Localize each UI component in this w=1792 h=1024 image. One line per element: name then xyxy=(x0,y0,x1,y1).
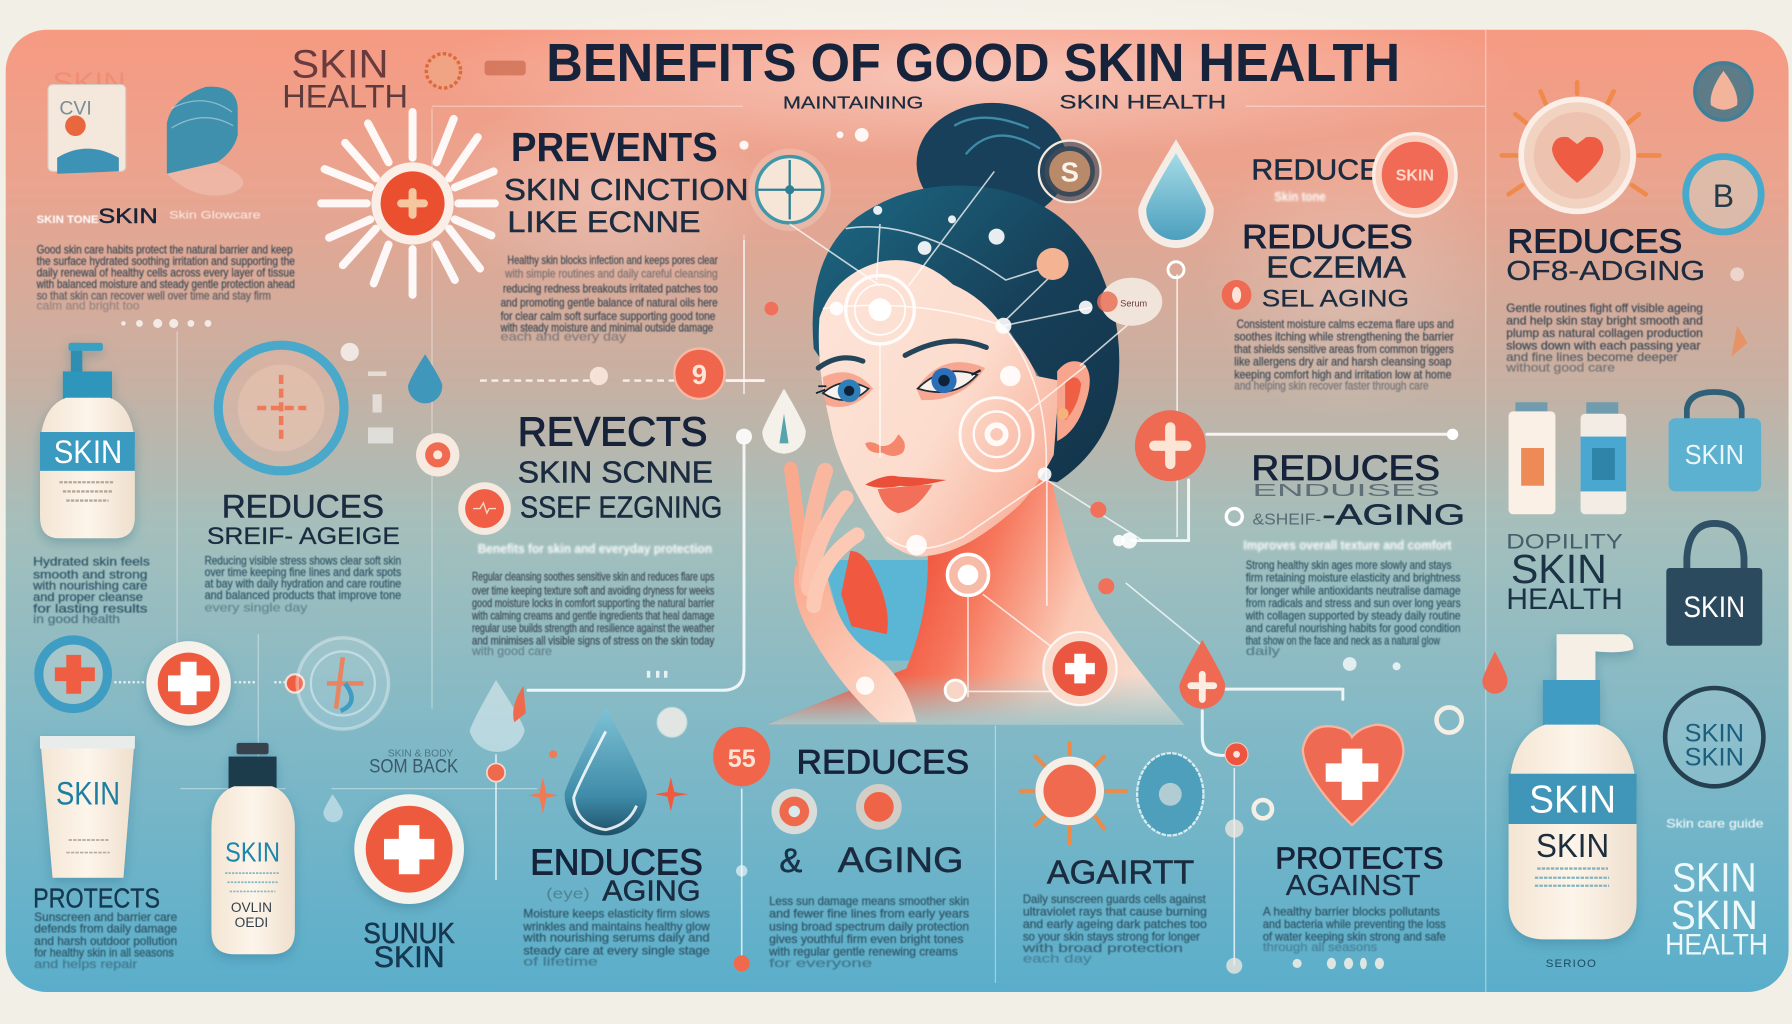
accent: blue patch behind hand xyxy=(823,560,931,661)
icon: blue bag: SKIN xyxy=(1685,439,1744,470)
title: BENEFITS OF GOOD SKIN HEALTH xyxy=(546,33,1400,93)
panel: top-left text: Skin Glowcare xyxy=(169,209,261,221)
heading: reduce with badge: REDUCE xyxy=(1251,154,1379,186)
icon: chest ring small xyxy=(945,680,966,701)
text block: protects against: of water keeping skin strong and safe xyxy=(1263,930,1446,944)
heading: reduces self-aging: ENDUISES xyxy=(1253,480,1440,500)
illustration: woman with skin map xyxy=(767,103,1202,725)
text block: protects left: defends from daily damage xyxy=(34,922,177,936)
small accent dots xyxy=(1730,267,1747,357)
text block: under bottle xyxy=(32,555,150,626)
logo: skin skin health white xyxy=(1665,854,1768,961)
icon: neck ring xyxy=(947,554,989,595)
icon: pump bottle xyxy=(1509,634,1637,939)
illustration: eye shadow xyxy=(823,362,985,407)
icon: pump bottle: SKIN xyxy=(1529,779,1616,822)
text block: prevents xyxy=(500,253,718,344)
small dots xyxy=(647,671,667,678)
text block: enduces: wrinkles and maintains healthy glow xyxy=(522,919,710,933)
small coral dots xyxy=(765,302,1114,594)
icon: dark ring skin badge: SKIN xyxy=(1685,720,1744,748)
text block: reduces self-aging: from radicals and stress and sun over long years xyxy=(1246,596,1461,610)
illustration: skin network nodes xyxy=(830,206,1137,695)
accent: fade below shoulders xyxy=(767,469,1184,725)
panel: top-left text: calm and bright too xyxy=(37,299,140,313)
text block: revects: with calming creams and gentle ingredients that heal damage xyxy=(471,608,715,622)
text block: protects left: Sunscreen and barrier care xyxy=(34,910,177,924)
text block: reduces and aging: and fewer fine lines from early years xyxy=(769,907,969,921)
text block: reduces self-aging: that show on the face and neck as a natural glow xyxy=(1246,634,1440,648)
text block: reduces eczema: Consistent moisture calms eczema flare ups and xyxy=(1237,317,1454,331)
illustration: eyebrows xyxy=(818,341,986,368)
icon: coral connector node xyxy=(1225,743,1248,974)
label: sunuk skin: SKIN xyxy=(374,941,445,974)
heading: reduces eczema: SEL AGING xyxy=(1262,285,1409,312)
panel: top-left text: daily renewal of healthy cells across every layer of tissue xyxy=(37,266,295,280)
icon: bun coin badge xyxy=(1039,141,1101,202)
icon: coral tag xyxy=(1222,280,1251,310)
heading: revects: SSEF EZGNING xyxy=(520,490,722,525)
heading: reduces and aging: REDUCES xyxy=(797,744,969,782)
dotted connector xyxy=(114,681,286,683)
icon: skin bottle left: SKIN xyxy=(54,434,122,470)
icon: blue ring badge: B xyxy=(1713,178,1734,214)
text block: revects: with good care xyxy=(471,644,552,658)
icon: product box and blue pouch xyxy=(48,66,243,196)
icon: glass circle xyxy=(286,638,389,729)
text block: under bottle: in good health xyxy=(33,612,120,626)
text block: against: ultraviolet rays that cause burning xyxy=(1023,904,1207,918)
pagination dots xyxy=(1293,958,1384,969)
text block: against: and early ageing dark patches too xyxy=(1023,917,1207,931)
icon: bottle with black cap: OEDI xyxy=(235,915,268,930)
icon: coral pulse badge xyxy=(458,482,511,535)
icon: white ring red cross xyxy=(146,641,231,726)
panel: top-left text xyxy=(36,203,295,313)
text block: reduces left xyxy=(205,554,401,614)
text block: prevents: reducing redness breakouts irritated patches too xyxy=(503,282,718,296)
icon: small blue drop xyxy=(408,354,442,403)
icon: drop with cross xyxy=(1179,640,1225,709)
icon: skin bottle left xyxy=(40,343,135,538)
icon: product box and blue pouch: SKIN xyxy=(53,66,126,97)
icon: coral badge xyxy=(1374,134,1456,216)
text block: under bottle: for lasting results xyxy=(33,602,147,616)
panel: right column xyxy=(1482,63,1768,970)
heading: enduces: ENDUCES xyxy=(530,841,703,882)
text block: reduces right: and help skin stay bright smooth and xyxy=(1506,314,1703,328)
icon: round blue gauge xyxy=(218,343,359,471)
logo: skin skin health white: SKIN xyxy=(1672,854,1757,900)
heading: reduces eczema: REDUCES xyxy=(1242,219,1413,256)
text block: reduces eczema: and helping skin recover faster through care xyxy=(1234,379,1429,393)
heading: reduces eczema: ECZEMA xyxy=(1266,250,1406,285)
text block: reduces right: slows down with each passing year xyxy=(1506,339,1701,353)
heading: protects left: PROTECTS xyxy=(33,882,160,913)
heading: reduces right xyxy=(1506,224,1705,286)
text block: protects against xyxy=(1263,904,1446,954)
small dots row xyxy=(1343,657,1401,671)
logo: skin health wordmark: HEALTH xyxy=(282,78,408,114)
text block: reduces self-aging: firm retaining moisture elasticity and brightness xyxy=(1246,571,1461,585)
subtitle left: MAINTAINING xyxy=(783,93,923,113)
icon: water drop top xyxy=(1138,139,1214,278)
text block: enduces xyxy=(522,907,710,969)
icon: product box and blue pouch: CVI xyxy=(59,97,92,119)
text block: reduces self-aging xyxy=(1243,539,1461,658)
text block: under bottle: and proper cleanse xyxy=(33,590,143,604)
icon: header stamps xyxy=(426,54,526,88)
text block: reduces right xyxy=(1505,301,1703,374)
heading: reduce with badge: Skin tone xyxy=(1274,190,1326,204)
heading: reduces and aging: & xyxy=(779,842,802,880)
icon: pair of small bottles xyxy=(1509,402,1626,514)
heading: dopility skin health: SKIN xyxy=(1511,546,1607,592)
heading: enduces xyxy=(530,841,703,908)
small rings xyxy=(1254,707,1462,818)
illustration: lips xyxy=(865,476,946,513)
heading: against: AGAIRTT xyxy=(1047,854,1194,891)
icon: cheek target xyxy=(960,398,1033,471)
icon: small white badge xyxy=(657,707,687,737)
icon: compass circle xyxy=(749,149,831,231)
icon: forehead target xyxy=(846,275,914,344)
text block: prevents: for clear calm soft surface supporting good tone xyxy=(501,309,716,323)
text block: protects against: through all seasons xyxy=(1263,940,1377,954)
small text below bottle: SERIOO xyxy=(1546,958,1597,970)
icon: garlic-like dark badge xyxy=(1695,63,1752,120)
text block: revects: good moisture locks in comfort supporting the natural barrier xyxy=(472,596,714,610)
text block: reduces and aging: using broad spectrum daily protection xyxy=(769,919,969,933)
logo: skin skin health white: HEALTH xyxy=(1665,928,1768,961)
icon: pump bottle: SKIN xyxy=(1536,828,1609,865)
text block: reduces eczema xyxy=(1234,317,1454,393)
illustration: skin network lines xyxy=(790,171,1202,697)
heading: reduces left: REDUCES xyxy=(222,489,384,525)
icon: bottle with black cap xyxy=(211,743,295,954)
subtitle right: SKIN HEALTH xyxy=(1059,92,1226,114)
illustration: hair xyxy=(813,103,1119,482)
text block: reduces left: Reducing visible stress shows clear soft skin xyxy=(205,554,401,568)
text block: prevents: and promoting gentle balance of natural oils here xyxy=(501,295,718,309)
text block: revects: over time keeping texture soft and avoiding dryness for weeks xyxy=(472,583,714,597)
text block: reduces self-aging: daily xyxy=(1246,644,1280,658)
text block: reduces and aging: Less sun damage means smoother skin xyxy=(769,894,969,908)
illustration: hand xyxy=(791,469,917,722)
icon: heart shield with cross xyxy=(1303,725,1403,825)
text block: revects: Regular cleansing soothes sensitive skin and reduces flare ups xyxy=(472,570,714,584)
text block: protects left xyxy=(34,910,177,971)
logo: skin health wordmark xyxy=(282,43,408,114)
text block: reduces left: over time keeping fine lines and dark spots xyxy=(205,565,401,579)
heading: reduces and aging xyxy=(779,744,969,880)
panel: top-left text: SKIN xyxy=(98,203,158,228)
heading: revects xyxy=(518,409,722,525)
icon: hair white badge xyxy=(1097,278,1162,326)
label: sunuk skin xyxy=(363,918,455,974)
text block: reduces eczema: soothes itching while strengthening the barrier xyxy=(1234,330,1454,344)
illustration: right eye xyxy=(918,368,981,393)
panel: top-left text: so that skin can recover well over time and stay firm xyxy=(37,288,271,302)
label: sunuk skin: SUNUK xyxy=(363,918,455,950)
heading: enduces: AGING xyxy=(602,876,701,908)
heading: prevents: PREVENTS xyxy=(511,124,718,170)
heading: enduces: (eye) xyxy=(546,886,590,902)
icon: coral nodes xyxy=(734,784,902,971)
icon: shoulder cross badge xyxy=(1043,632,1117,705)
dashed connector xyxy=(480,380,674,382)
text block: reduces eczema: like allergens dry air and harsh cleansing soap xyxy=(1234,355,1452,369)
icon: tube: SKIN xyxy=(56,776,120,812)
icon: small white ring xyxy=(1226,509,1242,525)
text block: prevents: Healthy skin blocks infection and keeps pores clear xyxy=(507,253,718,267)
text block: enduces: with nourishing serums daily and xyxy=(522,931,710,945)
small white marks near drop xyxy=(368,371,393,443)
logo: skin skin health white: SKIN xyxy=(1671,892,1758,938)
heading: dopility skin health xyxy=(1506,529,1623,616)
heading: reduces left xyxy=(207,489,400,550)
heading: protects against: PROTECTS xyxy=(1275,841,1443,876)
icon: coral circle with cross shape xyxy=(1135,410,1458,481)
icon: blue ring cross xyxy=(39,640,107,709)
heading: revects: REVECTS xyxy=(518,409,707,455)
heading: revects: SKIN SCNNE xyxy=(518,454,713,489)
illustration: left eye xyxy=(816,379,869,402)
icon: tube xyxy=(40,736,135,878)
text block: prevents: with steady moisture and minimal outside damage xyxy=(500,320,713,334)
icon: coral badge: SKIN xyxy=(1396,168,1434,185)
heading: reduces self-aging xyxy=(1251,448,1465,532)
icon: coral drop xyxy=(1482,651,1508,694)
icon: sun with medical cross xyxy=(321,112,495,295)
icon: sun heart badge xyxy=(1502,82,1659,211)
icon: bottle with black cap: SKIN xyxy=(225,837,280,868)
text block: reduces self-aging: for longer while antioxidants neutralise damage xyxy=(1246,583,1461,597)
panel: top-left text: SKIN TONE xyxy=(37,214,99,226)
text block: reduces self-aging: and careful nourishing habits for good condition xyxy=(1246,621,1461,635)
illustration: face xyxy=(819,260,1059,557)
icon: translucent drop with red accent xyxy=(470,680,526,782)
panel: top-left text: the surface hydrated soothing irritation and supporting the xyxy=(37,254,295,268)
text block: protects left: and helps repair xyxy=(34,957,137,971)
panel: top-left text: with balanced moisture and steady gentle protection ahead xyxy=(36,277,295,291)
text block: protects left: and harsh outdoor pollution xyxy=(34,934,177,948)
heading: dopility skin health: HEALTH xyxy=(1506,583,1623,616)
icon: coral oval badge: 55 xyxy=(728,745,756,773)
small text: skin back xyxy=(369,749,458,778)
icon: white drop mid xyxy=(762,389,806,454)
logo: skin health wordmark: SKIN xyxy=(291,43,389,87)
icon: blue ring badge xyxy=(1686,157,1761,232)
heading: reduces eczema xyxy=(1242,219,1413,312)
text block: reduces right: and fine lines become deeper xyxy=(1506,350,1678,364)
text block: reduces and aging: for everyone xyxy=(769,956,873,970)
icon: bottle with black cap: OVLIN xyxy=(231,900,272,915)
icon: dark bag: SKIN xyxy=(1683,591,1745,624)
small drop xyxy=(323,794,343,822)
text block: under bottle: with nourishing care xyxy=(32,579,148,593)
small blurred caption: Skin care guide xyxy=(1666,816,1764,830)
text block: revects xyxy=(471,542,715,658)
heading: reduces left: SREIF- AGEIGE xyxy=(207,523,400,550)
text block: enduces: steady care at every single stage xyxy=(523,943,710,957)
text block: enduces: Moisture keeps elasticity firm slows xyxy=(523,907,710,921)
text block: reduces eczema: that shields sensitive areas from common triggers xyxy=(1234,342,1454,356)
text block: revects: and minimises all visible signs of stress on the skin today xyxy=(472,634,714,648)
icon: small target badge xyxy=(416,433,459,477)
text block: reduces right: Gentle routines fight off visible ageing xyxy=(1506,301,1703,315)
text block: reduces eczema: keeping comfort high and irritation low at home xyxy=(1234,367,1452,381)
icon: dark ring skin badge: SKIN xyxy=(1685,744,1744,772)
heading: reduces and aging: AGING xyxy=(838,840,963,880)
icon: bun coin badge: S xyxy=(1061,157,1079,188)
icon: dark bag xyxy=(1666,523,1762,646)
text block: reduces left: and balanced products that improve tone xyxy=(205,588,401,602)
small text: skin back: SOM BACK xyxy=(369,756,458,778)
heading: reduces self-aging: REDUCES xyxy=(1251,448,1440,488)
illustration: neck and shoulders xyxy=(767,469,1184,725)
heading: reduces right: OF8-ADGING xyxy=(1506,255,1705,286)
panel: top-left text: Good skin care habits protect the natural barrier and keep xyxy=(37,243,293,257)
illustration: nose xyxy=(865,434,905,456)
text block: reduces self-aging: with collagen supported by steady daily routine xyxy=(1245,608,1461,622)
text block: against: each day xyxy=(1023,951,1091,965)
text block: against xyxy=(1021,892,1207,965)
text block: prevents: each and every day xyxy=(501,330,626,344)
text block: enduces: of lifetime xyxy=(523,955,598,969)
heading: prevents xyxy=(504,124,749,239)
small pagination dots xyxy=(121,319,211,328)
heading: reduces self-aging: -AGING xyxy=(1322,500,1465,532)
icon: hair white badge: Serum xyxy=(1120,298,1147,308)
text block: against: so your skin stays strong for longer xyxy=(1023,930,1200,944)
heading: protects against: AGAINST xyxy=(1286,870,1421,902)
small decorative nodes top centre xyxy=(736,128,869,445)
icon: coral oval badge xyxy=(713,727,770,786)
illustration: ear xyxy=(1057,361,1090,441)
heading: dopility skin health: DOPILITY xyxy=(1506,529,1623,554)
text block: reduces left: every single day xyxy=(205,600,307,614)
text block: prevents: with simple routines and daily careful cleansing xyxy=(504,267,718,281)
icon: dark ring skin badge xyxy=(1665,688,1763,786)
heading: prevents: LIKE ECNNE xyxy=(507,206,701,239)
icon: blue bag xyxy=(1669,392,1761,491)
heading: prevents: SKIN CINCTION xyxy=(504,172,749,207)
icon: temple peach node xyxy=(1037,248,1069,280)
heading: reduces self-aging: &SHEIF- xyxy=(1253,512,1321,529)
icon: large water drop xyxy=(528,706,688,835)
text block: revects: regular use builds strength and resilience against the weather xyxy=(472,621,714,635)
text block: reduces and aging: gives youthful firm even bright tones xyxy=(769,932,963,946)
icon: big red cross badge xyxy=(354,794,464,904)
icon: small sun xyxy=(1021,743,1126,843)
icon: coral hex badge: 9 xyxy=(692,359,707,390)
text block: reduces and aging: with regular gentle renewing creams xyxy=(768,944,958,958)
text block: under bottle: Hydrated skin feels xyxy=(33,555,150,569)
text block: revects: Benefits for skin and everyday protection xyxy=(478,542,712,556)
text block: reduces self-aging: Strong healthy skin ages more slowly and stays xyxy=(1246,558,1451,572)
text block: reduces left: at bay with daily hydration and care routine xyxy=(205,576,401,590)
heading: reduces right: REDUCES xyxy=(1507,224,1682,261)
text block: protects against: and bacteria while preventing the loss xyxy=(1263,917,1446,931)
heading: protects against xyxy=(1275,841,1443,902)
text block: reduces right: without good care xyxy=(1505,360,1615,374)
text block: reduces self-aging: Improves overall texture and comfort xyxy=(1243,539,1452,553)
text block: against: with broad protection xyxy=(1021,941,1183,955)
text block: under bottle: smooth and strong xyxy=(33,567,147,581)
text block: against: Daily sunscreen guards cells against xyxy=(1023,892,1206,906)
heading: reduce with badge xyxy=(1251,154,1379,204)
text block: reduces right: plump as natural collagen production xyxy=(1506,326,1703,340)
text block: reduces and aging xyxy=(768,894,969,970)
text block: protects left: for healthy skin in all seasons xyxy=(34,946,174,960)
icon: coral hex badge xyxy=(590,349,763,399)
small text: skin back: SKIN & BODY xyxy=(388,749,454,760)
icon: blue oval xyxy=(1137,753,1203,835)
text block: protects against: A healthy barrier blocks pollutants xyxy=(1263,904,1440,918)
